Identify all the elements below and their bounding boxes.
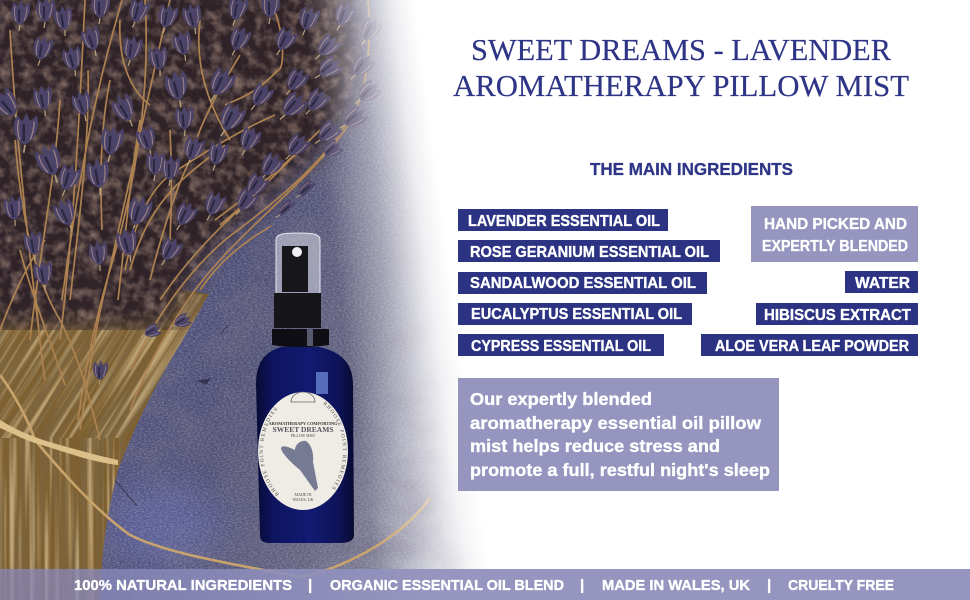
callout: product description: mist helps reduce stress and [470, 436, 720, 456]
ingredient tags: essential oils: ROSE GERANIUM ESSENTIAL OIL [470, 244, 709, 261]
ingredient tags: essential oils: EUCALYPTUS ESSENTIAL OIL [471, 306, 682, 323]
footer bar: ORGANIC ESSENTIAL OIL BLEND [330, 577, 564, 594]
callout: hand picked and expertly blended [751, 206, 918, 262]
footer bar [0, 569, 970, 600]
spray bottle [256, 232, 354, 543]
bottle label: PILLOW MIST [291, 434, 316, 438]
callout: product description: aromatherapy essential oil pillow [470, 413, 761, 433]
white fade over the photo [0, 0, 500, 600]
callout: product description [458, 378, 779, 491]
callout: product description: Our expertly blended [470, 389, 652, 409]
bottle sprayer [282, 246, 308, 292]
stone background [0, 0, 500, 600]
callout: hand picked and expertly blended: HAND PICKED AND [764, 216, 907, 233]
ingredient tags: other: HIBISCUS EXTRACT [764, 307, 912, 324]
callout: hand picked and expertly blended: EXPERTLY BLENDED [762, 238, 908, 255]
callout: product description: promote a full, restful night's sleep [470, 460, 770, 480]
bottle clear cap [276, 233, 320, 298]
title: AROMATHERAPY PILLOW MIST [453, 68, 909, 103]
footer bar: MADE IN WALES, UK [602, 577, 750, 594]
bottle body [256, 347, 354, 543]
ingredient tags: other: ALOE VERA LEAF POWDER [715, 338, 909, 355]
ingredient tags: essential oils: SANDALWOOD ESSENTIAL OIL [470, 275, 696, 292]
flower stems [0, 0, 369, 440]
photo: lavender bundle and spray bottle on stone [0, 0, 474, 600]
footer bar: CRUELTY FREE [788, 577, 894, 594]
footer bar: | [308, 577, 312, 594]
ingredient tags: other [701, 271, 918, 356]
heading: the main ingredients: THE MAIN INGREDIENTS [590, 159, 793, 179]
footer bar: | [580, 577, 584, 594]
bottle label: WALES, UK [292, 497, 314, 503]
title: SWEET DREAMS - LAVENDER [471, 32, 891, 67]
ingredient tags: essential oils: CYPRESS ESSENTIAL OIL [471, 338, 651, 355]
dried lavender bundle [0, 0, 400, 600]
bottle label: SWEET DREAMS [273, 425, 333, 434]
footer bar: 100% NATURAL INGREDIENTS [74, 577, 292, 594]
ingredient tags: other: WATER [855, 275, 910, 292]
footer bar: | [767, 577, 771, 594]
ingredient tags: essential oils [458, 209, 720, 356]
bottle label [258, 392, 348, 510]
flower heads [11, 0, 30, 31]
raffia tie [0, 375, 430, 577]
bottle collar [274, 293, 321, 328]
ingredient tags: essential oils: LAVENDER ESSENTIAL OIL [468, 213, 660, 230]
bottle label: RHOOSE POINT REMEDIES [323, 401, 346, 490]
title [453, 32, 909, 103]
bottle label: AROMATHERAPY COMFORTING [269, 421, 338, 426]
bottle label: RHOOSE POINT REMEDIES [260, 407, 279, 496]
bottle label: MADE IN [294, 492, 312, 497]
